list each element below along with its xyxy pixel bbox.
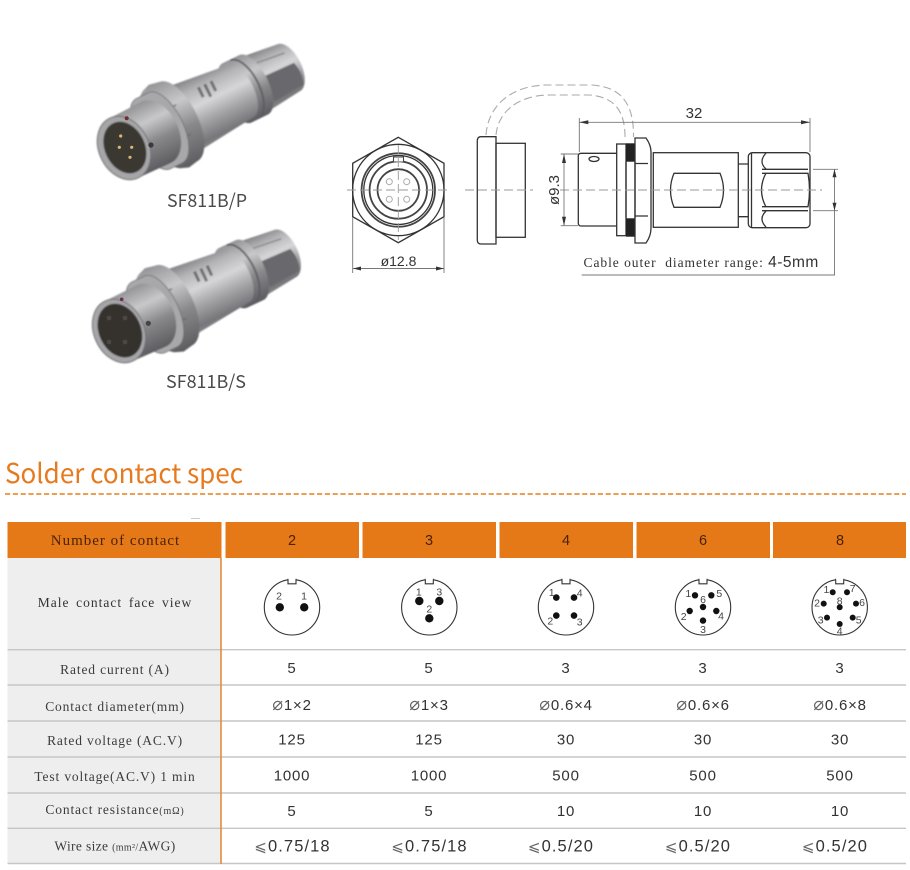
- row: rated current: 3: [561, 660, 571, 677]
- pin diagram: 6 contacts: [675, 579, 731, 636]
- pin diagram: 8 contacts: 7: [850, 583, 856, 595]
- drawing: protective cap with lanyard: [465, 85, 634, 244]
- row: contact resistance: 10: [557, 803, 575, 820]
- row: rated voltage: 125: [278, 732, 306, 748]
- dimension: 9.3: [546, 154, 578, 226]
- row: rated current: Rated current (A): [60, 662, 170, 677]
- row: contact resistance: Contact resistance(mΩ): [45, 802, 185, 817]
- row: wire size: ⩽0.5/20: [528, 838, 594, 856]
- pin diagram: 6 contacts: 3: [700, 624, 706, 636]
- row: contact diameter: [45, 694, 867, 715]
- pin diagram: 4 contacts: 4: [577, 587, 583, 599]
- row: test voltage: 1000: [274, 768, 310, 784]
- pin diagram: 6 contacts: 1: [685, 588, 691, 600]
- row: wire size: Wire size (mm²/AWG): [54, 838, 176, 854]
- row: wire size: ⩽0.75/18: [391, 838, 468, 856]
- table header row: 3: [425, 533, 433, 549]
- dimension: cable diameter: [582, 169, 838, 275]
- row: contact diameter: ⌀0.6×8: [813, 694, 867, 715]
- row: test voltage: 500: [826, 768, 854, 784]
- pin diagram: 3 contacts: 3: [436, 586, 442, 598]
- row: rated voltage: 30: [831, 732, 849, 748]
- pin diagram: 8 contacts: 3: [818, 615, 824, 627]
- table label column background: [8, 558, 221, 864]
- pin diagram: 8 contacts: 1: [823, 584, 829, 596]
- row: wire size: ⩽0.5/20: [665, 838, 731, 856]
- pin diagram: 6 contacts: 2: [681, 611, 687, 623]
- row: male contact face view: [38, 579, 867, 638]
- dimension: 9.3: ø9.3: [546, 175, 563, 205]
- row: contact resistance: 5: [424, 803, 434, 820]
- drawing: side view of connector: [560, 138, 822, 243]
- row: contact diameter: ⌀0.6×6: [676, 694, 730, 715]
- pin diagram: 2 contacts: [264, 579, 320, 635]
- table header row: 8: [836, 533, 844, 549]
- drawing: front hex view: [347, 137, 449, 273]
- row: rated voltage: 30: [557, 732, 575, 748]
- table header row: Number of contact: [51, 533, 180, 549]
- table header row: [8, 522, 906, 558]
- row: rated current: 3: [698, 660, 708, 677]
- caption: cable outer diameter range: Cable outer diameter range: 4-5mm: [584, 254, 819, 271]
- row: test voltage: [34, 768, 854, 784]
- pin diagram: 2 contacts: 1: [301, 590, 307, 602]
- row: contact resistance: 10: [831, 803, 849, 820]
- row: contact resistance: 5: [287, 803, 297, 820]
- row: rated current: 5: [424, 660, 434, 677]
- row: rated voltage: 125: [415, 732, 443, 748]
- label: SF811B/S: SF811B/S: [166, 368, 246, 394]
- table grid lines: [8, 558, 906, 864]
- row: test voltage: 500: [689, 768, 717, 784]
- row: wire size: ⩽0.5/20: [802, 838, 868, 856]
- pin diagram: 4 contacts: [538, 579, 594, 635]
- row: rated voltage: Rated voltage (AC.V): [47, 733, 183, 748]
- row: wire size: [54, 838, 868, 856]
- row: rated voltage: [47, 732, 849, 748]
- pin diagram: 3 contacts: 2: [426, 604, 432, 616]
- pin diagram: 8 contacts: 4: [837, 626, 843, 638]
- dimension: overall length 32: 32: [686, 105, 702, 122]
- product photo: SF811B/P connector: [81, 21, 320, 200]
- table header row: 4: [562, 533, 570, 549]
- pin diagram: 3 contacts: [402, 579, 457, 635]
- pin diagram: 4 contacts: 3: [577, 616, 583, 628]
- pin diagram: 8 contacts: [812, 579, 867, 638]
- pin diagram: 6 contacts: 6: [700, 594, 706, 606]
- pin diagram: 8 contacts: 8: [837, 595, 843, 607]
- pin diagram: 8 contacts: 2: [814, 597, 820, 609]
- pin diagram: 2 contacts: 2: [276, 590, 282, 602]
- row: rated voltage: 30: [694, 732, 712, 748]
- row: rated current: 3: [835, 660, 845, 677]
- row: test voltage: 1000: [411, 768, 447, 784]
- pin diagram: 4 contacts: 2: [547, 616, 553, 628]
- row: wire size: ⩽0.75/18: [254, 838, 331, 856]
- row: contact diameter: ⌀1×2: [272, 694, 312, 715]
- row: contact resistance: [45, 802, 849, 820]
- pin diagram: 6 contacts: 4: [718, 611, 724, 623]
- row: contact diameter: ⌀1×3: [409, 694, 449, 715]
- row: contact resistance: 10: [694, 803, 712, 820]
- row: test voltage: 500: [552, 768, 580, 784]
- row: rated current: 5: [287, 660, 297, 677]
- row: contact diameter: Contact diameter(mm): [45, 699, 185, 714]
- row: contact diameter: ⌀0.6×4: [539, 694, 593, 715]
- row: test voltage: Test voltage(AC.V) 1 min: [34, 769, 196, 784]
- pin diagram: 8 contacts: 5: [856, 615, 862, 627]
- table header row: 6: [699, 533, 707, 549]
- pin diagram: 6 contacts: 5: [716, 588, 722, 600]
- dimension: 12.8: ø12.8: [381, 253, 417, 269]
- label: SF811B/P: SF811B/P: [167, 187, 247, 213]
- pin diagram: 8 contacts: 6: [859, 597, 865, 609]
- row: male contact face view: Male contact face view: [38, 595, 192, 610]
- dimension: overall length 32: [579, 105, 810, 152]
- product photo: SF811B/S connector: [77, 206, 316, 383]
- pin diagram: 4 contacts: 1: [549, 587, 555, 599]
- table header row: 2: [288, 533, 296, 549]
- pin diagram: 3 contacts: 1: [416, 586, 422, 598]
- table: solder contact specifications: [8, 522, 906, 864]
- row: rated current: [60, 660, 845, 677]
- heading: Solder contact spec: Solder contact spec: [5, 452, 243, 491]
